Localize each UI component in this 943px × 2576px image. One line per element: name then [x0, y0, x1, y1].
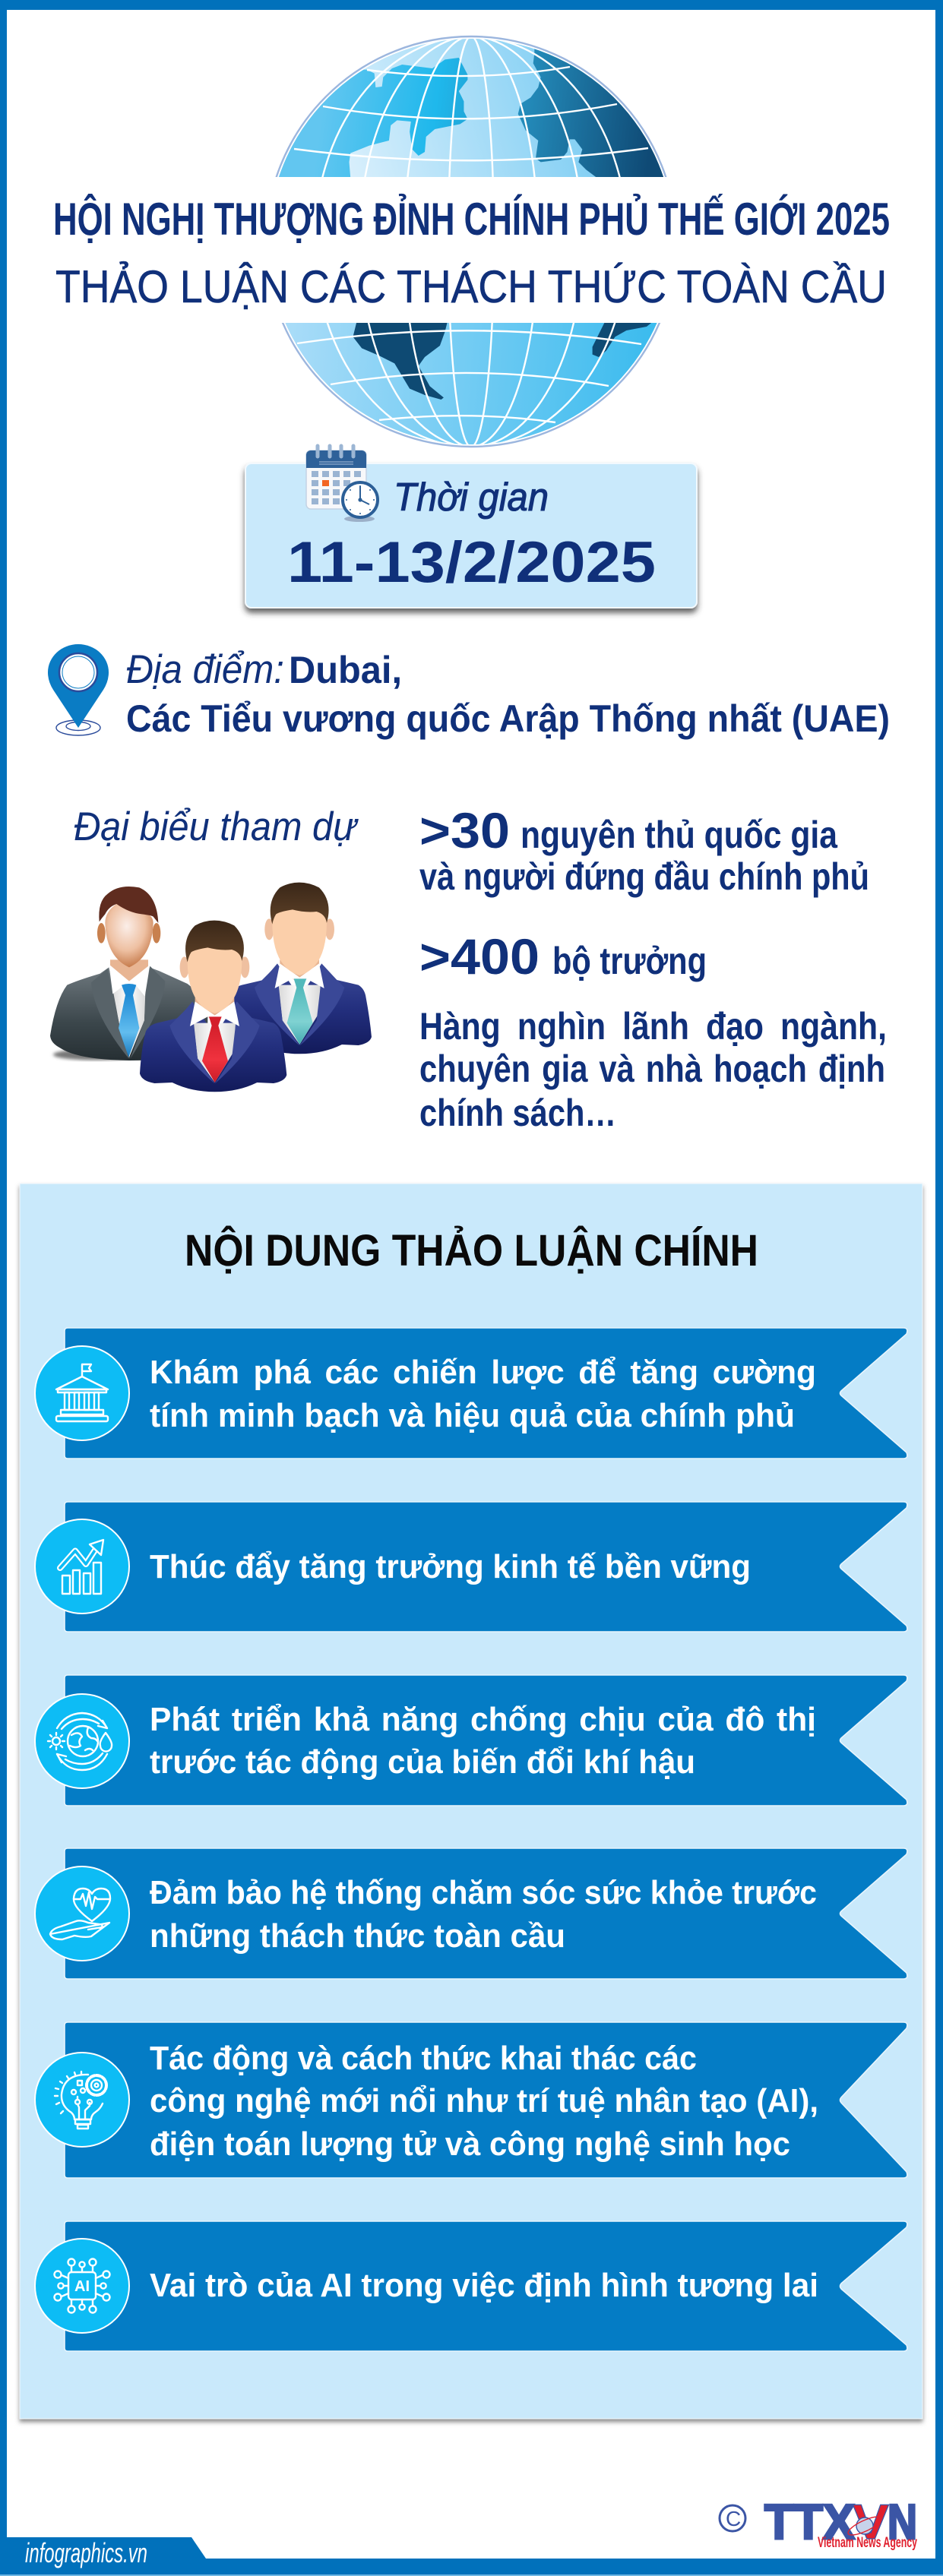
- delegate statistics: nguyên thủ quốc gia: [521, 814, 838, 856]
- footer tab: infographics.vn: [25, 2537, 147, 2568]
- icon: AI chip: AI: [74, 2278, 90, 2295]
- topic 5: công nghệ mới nổi như trí tuệ nhân tạo (AI),: [150, 2082, 818, 2119]
- panel: date: Thời gian: [394, 476, 549, 520]
- right delegate with teal tie: [225, 883, 372, 1054]
- icon: AI chip: [55, 2259, 109, 2312]
- icon: calendar and clock: [306, 446, 378, 522]
- topic 6: [35, 2221, 907, 2351]
- location text: Địa điểm:: [126, 647, 284, 692]
- location text: [126, 647, 890, 740]
- topic 3: Phát triển khả năng chống chịu của đô thị: [150, 1701, 816, 1738]
- logo: TTXVN Vietnam News Agency: N: [888, 2494, 917, 2549]
- topic 1: tính minh bạch và hiệu quả của chính phủ: [150, 1397, 795, 1434]
- icon: location pin: [48, 644, 109, 735]
- topic 1: [35, 1328, 907, 1459]
- topic 3: trước tác động của biến đổi khí hậu: [150, 1743, 695, 1781]
- delegate statistics: chính sách…: [419, 1092, 616, 1134]
- logo: TTXVN Vietnam News Agency: TTX: [764, 2494, 855, 2549]
- panel heading: NỘI DUNG THẢO LUẬN CHÍNH: [185, 1226, 758, 1275]
- panel: date: 11-13/2/2025: [287, 530, 656, 595]
- topic 3: [35, 1675, 907, 1806]
- left delegate in grey suit: [50, 887, 207, 1060]
- panel: main discussion topics: [20, 1184, 922, 2419]
- topic 6: Vai trò của AI trong việc định hình tương lai: [150, 2267, 818, 2304]
- topic 5: [35, 2022, 907, 2178]
- icon: climate and earth: [48, 1713, 112, 1770]
- icon: government building: [56, 1364, 108, 1421]
- logo: TTXVN Vietnam News Agency: C: [726, 2507, 741, 2530]
- icon: growth chart: [60, 1540, 103, 1594]
- location text: Dubai,: [289, 649, 402, 691]
- delegate statistics: bộ trưởng: [552, 940, 707, 982]
- topic 4: Đảm bảo hệ thống chăm sóc sức khỏe trước: [150, 1874, 817, 1911]
- topic 1: Khám phá các chiến lược để tăng cường: [150, 1354, 816, 1391]
- topic 4: [35, 1848, 907, 1979]
- icon: healthcare hand and heart: [50, 1889, 110, 1939]
- delegate statistics: >400: [419, 928, 540, 985]
- location text: Các Tiểu vương quốc Arập Thống nhất (UAE): [126, 697, 890, 740]
- delegate statistics: >30: [419, 802, 510, 858]
- topic 2: Thúc đẩy tăng trưởng kinh tế bền vững: [150, 1548, 751, 1585]
- delegate statistics: [419, 802, 887, 1134]
- centre delegate with red tie: [140, 921, 286, 1092]
- title: [53, 194, 890, 312]
- topic 4: những thách thức toàn cầu: [150, 1917, 565, 1955]
- logo: TTXVN Vietnam News Agency: [720, 2494, 917, 2551]
- icon: three delegates: [50, 883, 372, 1092]
- panel: date: [245, 446, 697, 608]
- globe illustration: [258, 23, 684, 460]
- topic 5: điện toán lượng tử và công nghệ sinh học: [150, 2126, 790, 2163]
- topic 2: [35, 1502, 907, 1632]
- logo: TTXVN Vietnam News Agency: V: [853, 2494, 889, 2549]
- delegates label: Đại biểu tham dự: [74, 804, 359, 849]
- icon: technology light bulb: [55, 2072, 106, 2129]
- topic 5: Tác động và cách thức khai thác các: [150, 2040, 697, 2077]
